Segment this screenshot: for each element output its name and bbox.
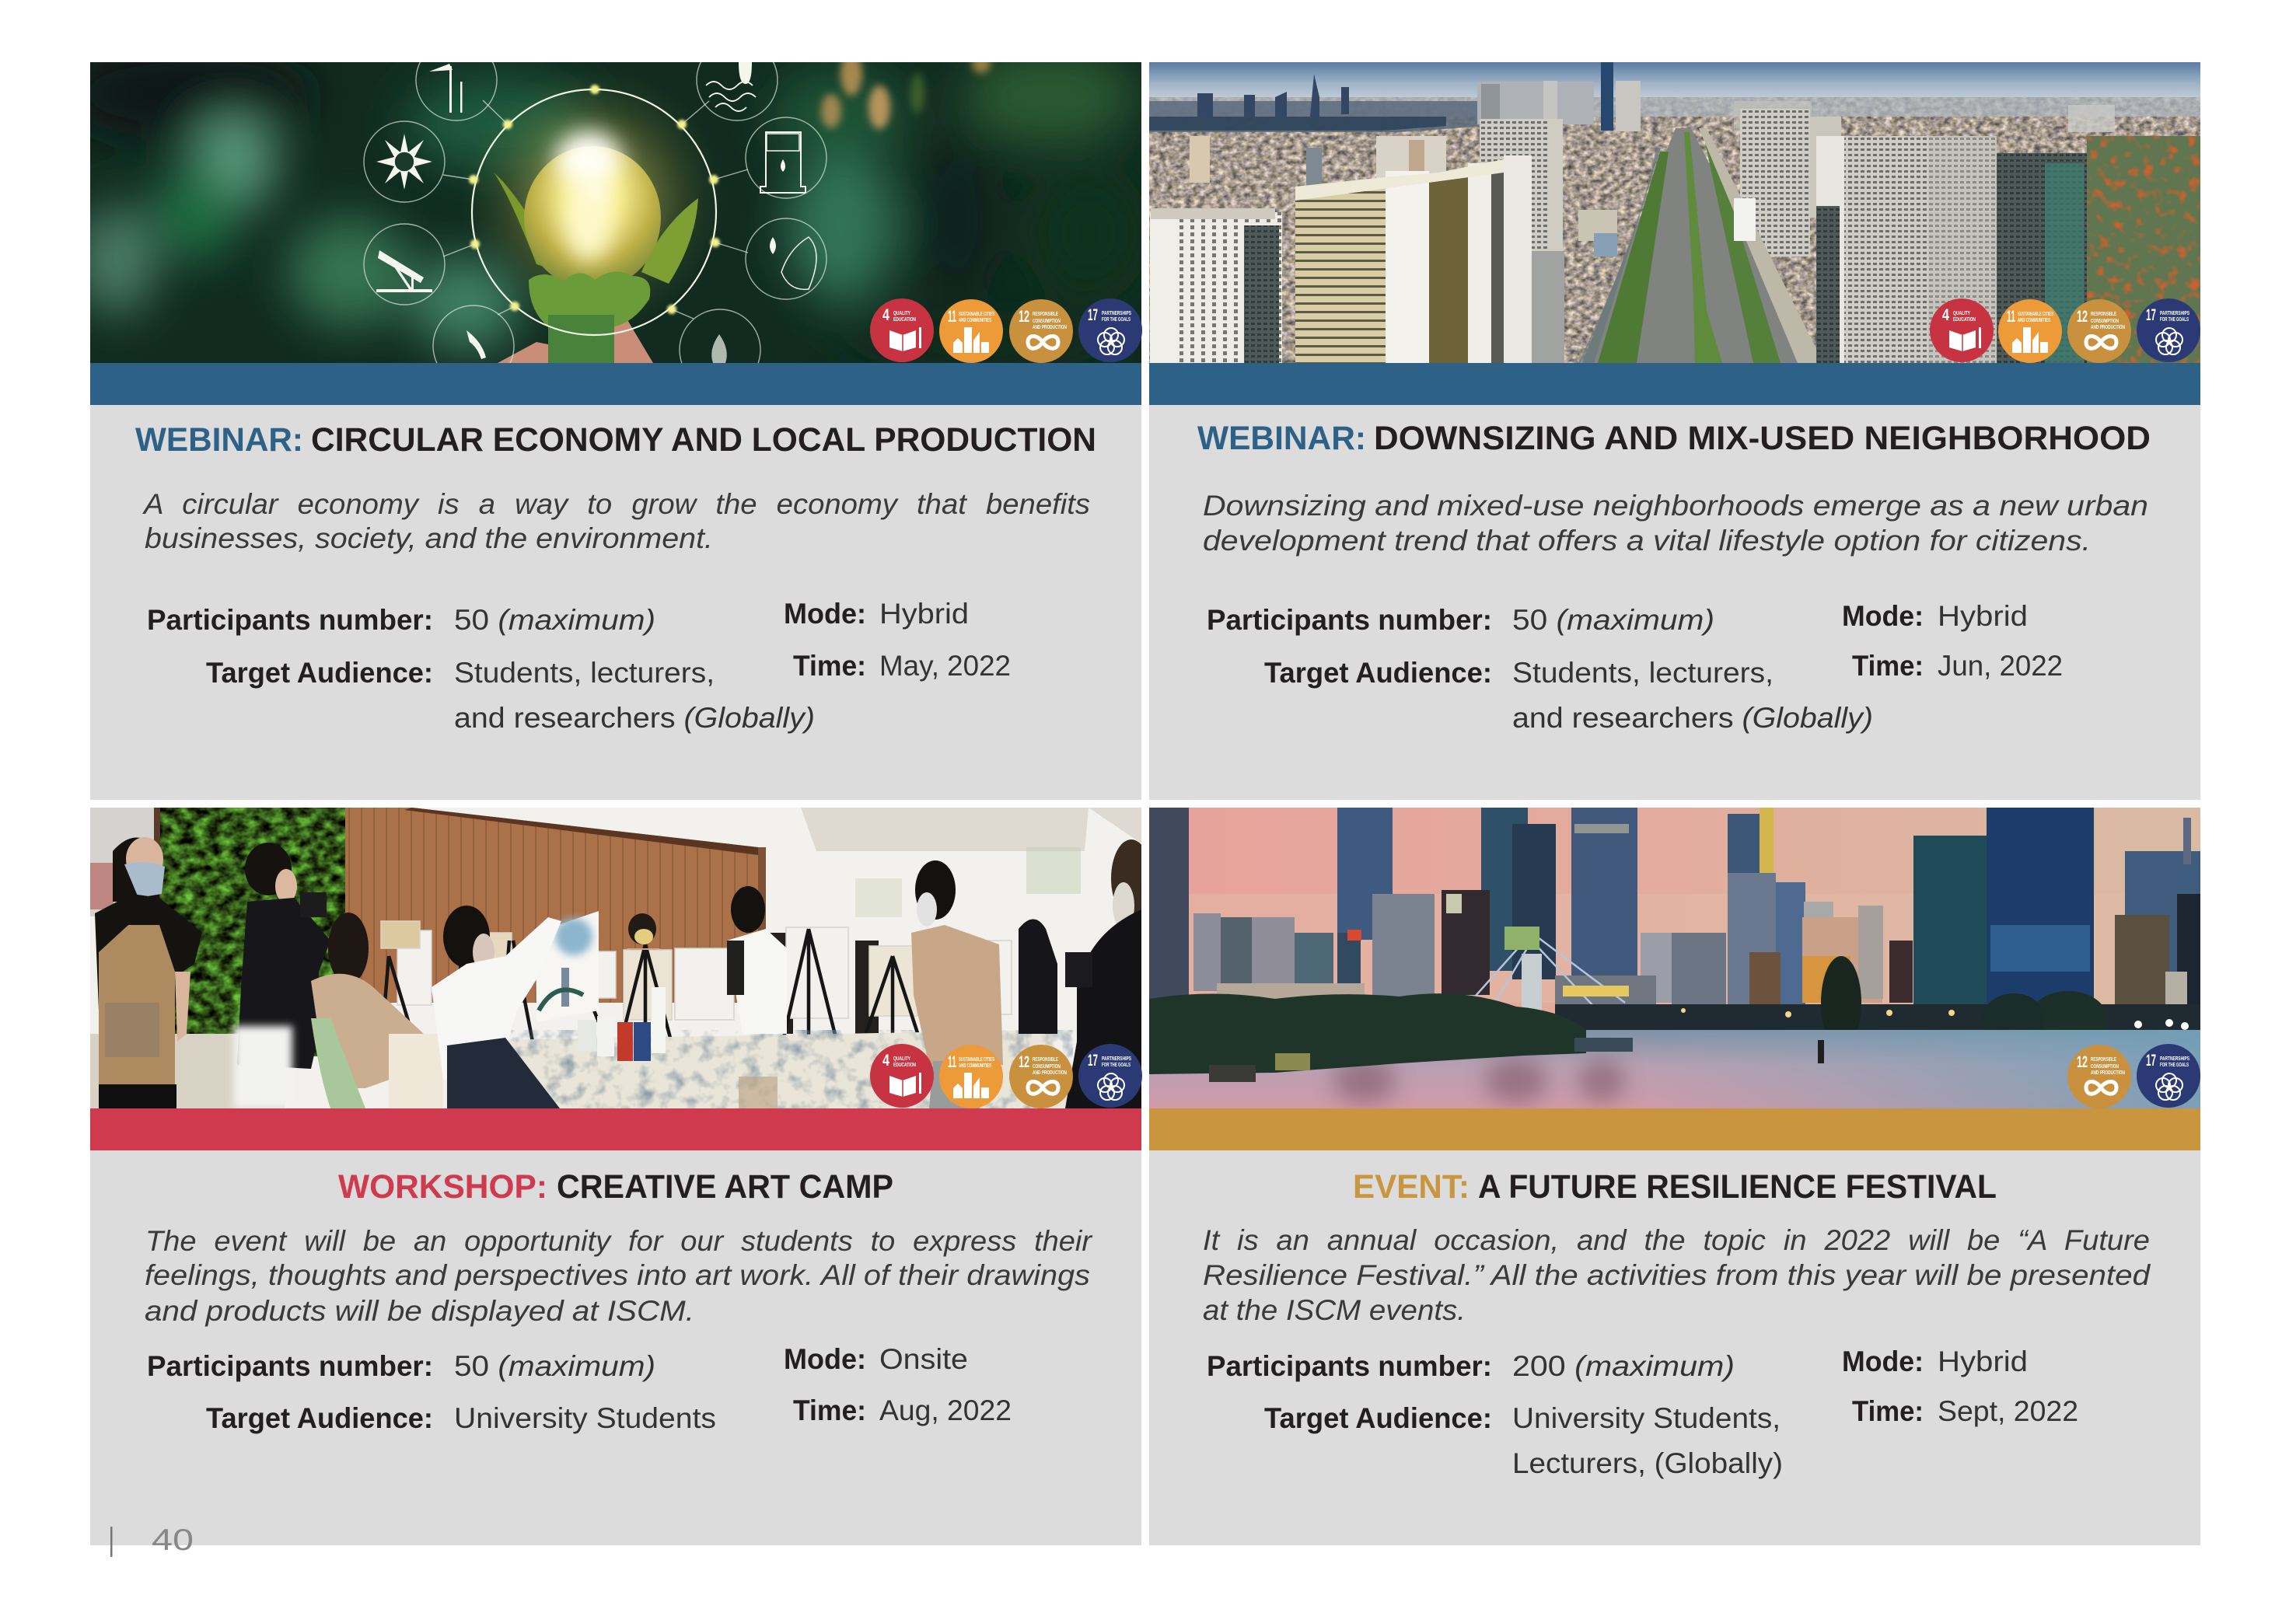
badge: SDG 11: SUSTAINABLE CITIES — [2018, 310, 2053, 317]
participants number: 50 (maximum) — [1512, 604, 1714, 636]
participants number: Participants number: — [147, 1350, 433, 1382]
target audience: University Students, — [1512, 1402, 1781, 1434]
badge: SDG 12: AND PRODUCTION — [2091, 1069, 2125, 1076]
badge: SDG 11: 11 — [948, 1053, 956, 1071]
badge: SDG 17 — [1078, 1044, 1142, 1108]
time — [793, 650, 1011, 682]
participants number — [1207, 604, 1714, 636]
target audience: University Students — [454, 1402, 716, 1434]
heading: WEBINAR: — [135, 421, 303, 459]
participants number: 200 (maximum) — [1512, 1350, 1735, 1382]
panel: circular economy webinar — [62, 40, 1151, 800]
target audience — [206, 657, 815, 734]
SDG badges — [870, 1044, 1142, 1108]
description — [1203, 1224, 2151, 1326]
badge: SDG 4: 4 — [1942, 306, 1949, 324]
photo: city skyline and river at sunset — [1148, 808, 2200, 1108]
target audience: Target Audience: — [1264, 657, 1492, 689]
badge: SDG 17 — [2137, 298, 2200, 362]
mode — [1842, 1346, 2028, 1377]
artist in white shirt — [432, 906, 561, 1108]
table — [498, 1030, 1073, 1108]
text panel background — [90, 405, 1141, 800]
badge: SDG 17: 17 — [1088, 306, 1098, 324]
badge: SDG 17: PARTNERSHIPS — [1102, 309, 1131, 316]
badge: SDG 12: CONSUMPTION — [2091, 317, 2119, 324]
description: and products will be displayed at ISCM. — [145, 1295, 694, 1327]
SDG badges — [870, 298, 1142, 363]
right towers — [1997, 153, 2087, 363]
badge: SDG 17 — [2137, 1044, 2200, 1108]
target audience: Lecturers, (Globally) — [1512, 1447, 1783, 1479]
paint bottles — [578, 987, 666, 1061]
easels — [381, 929, 919, 1049]
heading: WEBINAR: — [1197, 420, 1366, 457]
colour bar: blue — [1149, 363, 2200, 405]
colour bar: blue — [90, 363, 1141, 405]
target audience: and researchers (Globally) — [1512, 702, 1873, 734]
badge: SDG 12: CONSUMPTION — [2091, 1063, 2119, 1070]
badge: SDG 12: RESPONSIBLE — [2091, 310, 2116, 317]
distant skyline — [1149, 62, 2115, 132]
target audience — [1264, 1402, 1783, 1479]
badge: SDG 12: AND PRODUCTION — [1033, 1069, 1067, 1076]
badge: SDG 17: 17 — [1088, 1052, 1098, 1070]
badge: SDG 11 — [1998, 299, 2062, 363]
heading — [338, 1168, 893, 1206]
heading: EVENT: — [1353, 1168, 1470, 1206]
badge: SDG 17 — [1078, 298, 1142, 362]
badge: SDG 4: 4 — [882, 306, 889, 324]
badge: SDG 12: CONSUMPTION — [1033, 1063, 1061, 1070]
description: The event will be an opportunity for our students to express their — [145, 1225, 1093, 1257]
badge: SDG 12 — [2067, 1045, 2131, 1108]
person in white shirt, centre right — [727, 886, 787, 1034]
mode: Onsite — [879, 1343, 968, 1375]
participants number: Participants number: — [1207, 604, 1492, 636]
person with camera — [233, 843, 330, 1108]
mode: Mode: — [784, 1343, 866, 1375]
man in beige shirt — [911, 860, 1003, 1108]
page number — [110, 1524, 194, 1557]
description: A circular economy is a way to grow the economy that benefits — [142, 488, 1090, 520]
badge: SDG 12: 12 — [1019, 308, 1029, 326]
description — [142, 488, 1090, 554]
heading: WORKSHOP: — [338, 1168, 547, 1206]
heading: CIRCULAR ECONOMY AND LOCAL PRODUCTION — [311, 421, 1096, 459]
badge: SDG 17: FOR THE GOALS — [2160, 1061, 2189, 1068]
participants number: 50 (maximum) — [454, 604, 655, 636]
badge: SDG 4: EDUCATION — [893, 316, 916, 323]
badge: SDG 11 — [939, 1045, 1003, 1108]
mode: Mode: — [784, 598, 866, 630]
badge: SDG 11: SUSTAINABLE CITIES — [959, 1056, 994, 1063]
text panel background — [1149, 1150, 2200, 1545]
badge: SDG 12 — [1009, 299, 1073, 363]
colour bar: gold — [1149, 1108, 2200, 1150]
badge: SDG 4: EDUCATION — [1953, 316, 1976, 323]
description: It is an annual occasion, and the topic in 2022 will be “A Future — [1203, 1224, 2150, 1256]
canvases — [380, 920, 1012, 1021]
description: Downsizing and mixed-use neighborhoods emerge as a new urban — [1203, 490, 2148, 522]
mode — [784, 1343, 968, 1375]
target audience: and researchers (Globally) — [454, 702, 815, 734]
time: Jun, 2022 — [1938, 650, 2063, 682]
badge: SDG 11: AND COMMUNITIES — [2018, 316, 2050, 323]
badge: SDG 17: FOR THE GOALS — [1102, 316, 1131, 323]
target audience: Students, lecturers, — [1512, 657, 1774, 689]
badge: SDG 4 — [870, 298, 934, 362]
badge: SDG 12: 12 — [2077, 1053, 2088, 1071]
badge: SDG 17: PARTNERSHIPS — [2160, 309, 2189, 316]
mode: Hybrid — [879, 598, 969, 630]
badge: SDG 17: FOR THE GOALS — [2160, 316, 2189, 323]
mode — [1842, 600, 2028, 632]
badge: SDG 11: 11 — [2007, 308, 2015, 326]
SDG badges — [2067, 1044, 2200, 1108]
description: development trend that offers a vital lifestyle option for citizens. — [1203, 525, 2091, 557]
badge: SDG 11: SUSTAINABLE CITIES — [959, 310, 994, 317]
mode — [784, 598, 969, 630]
participants number — [147, 1350, 655, 1382]
badge: SDG 11 — [939, 299, 1003, 363]
time: Time: — [1852, 650, 1924, 682]
badge: SDG 12: 12 — [2077, 308, 2088, 326]
colour bar: red — [90, 1108, 1141, 1150]
badge: SDG 4: QUALITY — [893, 309, 910, 316]
target audience: Target Audience: — [206, 1402, 433, 1434]
target audience: Target Audience: — [206, 657, 433, 689]
badge: SDG 17: PARTNERSHIPS — [1102, 1055, 1131, 1062]
description — [1203, 490, 2148, 557]
participants number — [147, 604, 655, 636]
SDG badges — [1930, 298, 2200, 363]
description: Resilience Festival.” All the activities from this year will be presented — [1203, 1259, 2151, 1291]
badge: SDG 12: RESPONSIBLE — [1033, 310, 1058, 317]
participants number: Participants number: — [147, 604, 433, 636]
time: Aug, 2022 — [879, 1394, 1012, 1426]
right villas — [2087, 136, 2200, 363]
time: May, 2022 — [879, 650, 1011, 682]
badge: SDG 12: AND PRODUCTION — [2091, 323, 2125, 330]
badge: SDG 4: QUALITY — [1953, 309, 1970, 316]
target audience — [1264, 657, 1873, 734]
badge: SDG 12: AND PRODUCTION — [1033, 323, 1067, 330]
panel: creative art camp workshop — [90, 808, 1151, 1545]
highway — [1582, 128, 1812, 363]
left towers — [1176, 212, 1282, 363]
woman with apron — [95, 837, 202, 1108]
woman in black, right edge — [1065, 839, 1151, 1108]
mode: Hybrid — [1938, 600, 2028, 632]
woman at back right — [1019, 919, 1057, 1034]
description: businesses, society, and the environment. — [145, 522, 713, 554]
panel: downsizing webinar — [1149, 62, 2200, 800]
mid-distance towers — [1190, 109, 1841, 257]
badge: SDG 12: RESPONSIBLE — [2091, 1056, 2116, 1063]
badge: SDG 12: 12 — [1019, 1053, 1029, 1071]
target audience: Students, lecturers, — [454, 657, 715, 689]
badge: SDG 17: 17 — [2146, 306, 2156, 324]
badge: SDG 4: QUALITY — [893, 1055, 910, 1062]
photo: students painting at easels — [90, 808, 1151, 1108]
time: Time: — [793, 650, 866, 682]
badge: SDG 12 — [2067, 299, 2131, 363]
participants number: Participants number: — [1207, 1350, 1492, 1382]
time: Sept, 2022 — [1938, 1395, 2078, 1427]
badge: SDG 11: 11 — [948, 308, 956, 326]
time — [793, 1394, 1012, 1426]
photo: glowing bulb in a leaf with eco icons — [90, 62, 1141, 363]
photo: aerial city towers and highway — [1149, 62, 2200, 365]
badge: SDG 17: FOR THE GOALS — [1102, 1061, 1131, 1068]
page number: 40 — [152, 1524, 194, 1557]
description — [145, 1225, 1093, 1327]
mode: Hybrid — [1938, 1346, 2028, 1377]
heading: DOWNSIZING AND MIX-USED NEIGHBORHOOD — [1374, 420, 2151, 457]
badge: SDG 4 — [870, 1044, 934, 1108]
badge: SDG 11: AND COMMUNITIES — [959, 1062, 991, 1069]
badge: SDG 12 — [1009, 1045, 1073, 1108]
panel: future resilience festival event — [1148, 808, 2200, 1545]
participants number — [1207, 1350, 1735, 1382]
heading: A FUTURE RESILIENCE FESTIVAL — [1478, 1168, 1997, 1206]
person in mask, far centre — [626, 913, 661, 950]
time — [1852, 650, 2063, 682]
text panel background — [1149, 405, 2200, 800]
big canvas — [536, 911, 599, 1022]
heading: CREATIVE ART CAMP — [557, 1168, 893, 1206]
badge: SDG 12: CONSUMPTION — [1033, 317, 1061, 324]
target audience: Target Audience: — [1264, 1402, 1492, 1434]
badge: SDG 4 — [1930, 298, 1994, 362]
badge: SDG 17: 17 — [2146, 1052, 2156, 1070]
badge: SDG 4: 4 — [882, 1052, 889, 1070]
badge: SDG 11: AND COMMUNITIES — [959, 316, 991, 323]
time: Time: — [1852, 1395, 1924, 1427]
badge: SDG 12: RESPONSIBLE — [1033, 1056, 1058, 1063]
people behind canvases — [459, 933, 879, 1034]
text panel background — [90, 1150, 1141, 1545]
time — [1852, 1395, 2078, 1427]
participants number: 50 (maximum) — [454, 1350, 655, 1382]
time: Time: — [793, 1394, 866, 1426]
seated woman in hoodie — [311, 913, 443, 1108]
badge: SDG 17: PARTNERSHIPS — [2160, 1055, 2189, 1062]
mode: Mode: — [1842, 600, 1924, 632]
mode: Mode: — [1842, 1346, 1924, 1377]
description: feelings, thoughts and perspectives into art work. All of their drawings — [145, 1259, 1090, 1291]
badge: SDG 4: EDUCATION — [893, 1061, 916, 1068]
target audience — [206, 1402, 716, 1434]
description: at the ISCM events. — [1203, 1294, 1466, 1326]
